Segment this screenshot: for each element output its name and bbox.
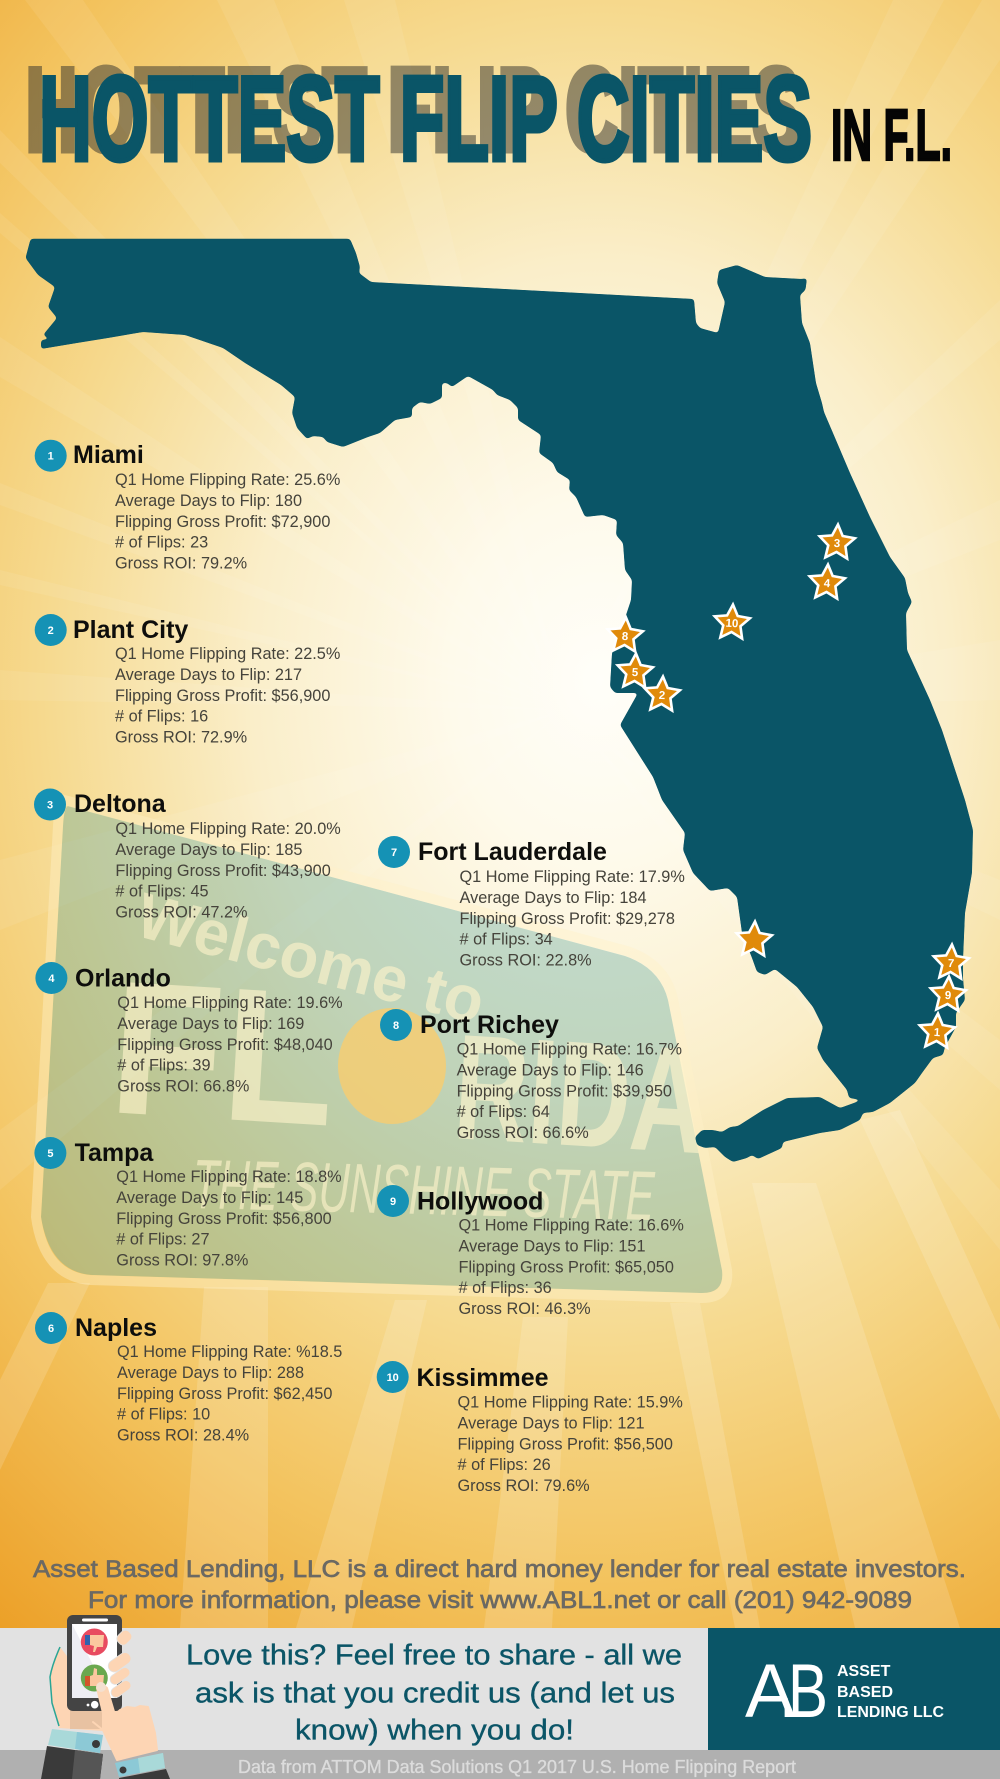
city 1: Miami (35, 440, 340, 573)
city 4: Orlando: Q1 Home Flipping Rate: 19.6% (117, 994, 343, 1012)
city 1: Miami: 1 (48, 451, 54, 463)
city 8: Port Richey: 8 (393, 1020, 399, 1032)
city 4: Orlando: Flipping Gross Profit: $48,040 (117, 1036, 333, 1054)
logo mark: B (788, 1649, 828, 1734)
source band (0, 1750, 1000, 1779)
city 8: Port Richey: # of Flips: 64 (457, 1103, 550, 1121)
star: 3 Deltona (819, 524, 856, 559)
city 9: Hollywood: 9 (390, 1196, 396, 1208)
city 3: Deltona: Average Days to Flip: 185 (115, 841, 302, 859)
city 7: Fort Lauderdale: 7 (391, 847, 397, 859)
star: 9 Hollywood (930, 976, 967, 1011)
star: 5 Tampa (617, 653, 654, 688)
city 10: Kissimmee: Average Days to Flip: 121 (458, 1414, 645, 1432)
city 3: Deltona: # of Flips: 45 (115, 883, 209, 901)
city 5: Tampa: Flipping Gross Profit: $56,800 (116, 1210, 332, 1228)
city 6: Naples: Gross ROI: 28.4% (117, 1427, 249, 1445)
city 10: Kissimmee: 10 (387, 1372, 399, 1384)
city 6: Naples: Average Days to Flip: 288 (117, 1364, 304, 1382)
city 1: Miami: Gross ROI: 79.2% (115, 555, 247, 573)
city 1: Miami: Q1 Home Flipping Rate: 25.6% (115, 471, 340, 489)
city 10: Kissimmee (377, 1361, 683, 1495)
city 6: Naples: Flipping Gross Profit: $62,450 (117, 1385, 332, 1403)
city 9: Hollywood: Flipping Gross Profit: $65,050 (458, 1258, 674, 1276)
share band (0, 1628, 708, 1750)
city 9: Hollywood (377, 1185, 684, 1318)
star: 8 Port Richey: 8 (621, 631, 629, 643)
logo wordmark (837, 1663, 944, 1721)
city 2: Plant City: Q1 Home Flipping Rate: 22.5% (115, 645, 340, 663)
star: 4 Orlando (809, 564, 846, 599)
city 5: Tampa: Gross ROI: 97.8% (116, 1252, 248, 1270)
star: 4 Orlando: 4 (823, 578, 831, 590)
city 1: Miami: Flipping Gross Profit: $72,900 (115, 513, 330, 531)
city 3: Deltona: Flipping Gross Profit: $43,900 (115, 862, 331, 880)
city 7: Fort Lauderdale: Average Days to Flip: 184 (460, 889, 647, 907)
city 5: Tampa: # of Flips: 27 (116, 1231, 210, 1249)
city 2: Plant City (35, 614, 340, 747)
city 8: Port Richey: Gross ROI: 66.6% (457, 1124, 589, 1142)
star: 3 Deltona: 3 (833, 538, 840, 550)
city 5: Tampa (34, 1137, 342, 1270)
city 10: Kissimmee: Q1 Home Flipping Rate: 15.9% (458, 1394, 683, 1412)
city 8: Port Richey: Port Richey (420, 1011, 559, 1039)
Florida map (26, 239, 973, 1162)
city 5: Tampa: Q1 Home Flipping Rate: 18.8% (116, 1168, 342, 1186)
city 9: Hollywood: # of Flips: 36 (458, 1279, 552, 1297)
icon: hand holding phone (41, 1615, 170, 1779)
city 7: Fort Lauderdale: # of Flips: 34 (460, 931, 553, 949)
source text: Data from ATTOM Data Solutions Q1 2017 U.S. Home Flipping Report (238, 1757, 796, 1777)
star: 8 Port Richey (607, 617, 644, 652)
city 4: Orlando: 4 (48, 973, 55, 985)
city 10: Kissimmee: Gross ROI: 79.6% (458, 1477, 590, 1495)
welcome sign (36, 800, 727, 1298)
logo mark (745, 1649, 828, 1734)
star: 7 Fort Lauderdale: 7 (947, 958, 954, 970)
share message: Love this? Feel free to share - all we (186, 1640, 682, 1672)
city 2: Plant City: Average Days to Flip: 217 (115, 666, 302, 684)
city 2: Plant City: 2 (48, 625, 54, 637)
sign text: FL: FL (104, 941, 342, 1167)
city 5: Tampa: Tampa (75, 1139, 154, 1167)
share message: ask is that you credit us (and let us (195, 1678, 675, 1710)
company blurb: For more information, please visit www.ABL1.net or call (201) 942-9089 (88, 1587, 912, 1614)
star: 10 Kissimmee (714, 604, 751, 639)
city 6: Naples: # of Flips: 10 (117, 1406, 210, 1424)
city 6: Naples: 6 (48, 1323, 54, 1335)
city 1: Miami: # of Flips: 23 (115, 534, 208, 552)
star: 5 Tampa: 5 (631, 667, 639, 679)
star: 1 Miami: 1 (933, 1027, 941, 1039)
city 6: Naples: Q1 Home Flipping Rate: %18.5 (117, 1343, 342, 1361)
sign text: welcome to: Welcome to (129, 879, 492, 1038)
city 6: Naples (35, 1312, 342, 1445)
city 4: Orlando: # of Flips: 39 (117, 1057, 211, 1075)
city 3: Deltona: Gross ROI: 47.2% (115, 904, 248, 922)
star: 6 Naples (736, 921, 773, 956)
city 9: Hollywood: Hollywood (417, 1188, 543, 1216)
city 4: Orlando: Gross ROI: 66.8% (117, 1078, 249, 1096)
logo mark: A (745, 1649, 795, 1734)
logo mark: L (782, 1692, 800, 1723)
city 3: Deltona (34, 788, 341, 922)
sign text: the sunshine state: THE SUNSHINE STATE (192, 1145, 656, 1235)
city 9: Hollywood: Average Days to Flip: 151 (458, 1237, 646, 1255)
city 9: Hollywood: Gross ROI: 46.3% (458, 1300, 591, 1318)
company blurb (33, 1556, 966, 1614)
city 1: Miami: Miami (73, 441, 144, 469)
logo wordmark: LENDING LLC (837, 1704, 944, 1721)
sign text: RIDA: RIDA (450, 1002, 710, 1185)
city 7: Fort Lauderdale: Fort Lauderdale (418, 838, 607, 866)
city 8: Port Richey: Average Days to Flip: 146 (457, 1061, 644, 1079)
city 2: Plant City: Flipping Gross Profit: $56,900 (115, 687, 330, 705)
city 9: Hollywood: Q1 Home Flipping Rate: 16.6% (458, 1216, 684, 1234)
city 10: Kissimmee: # of Flips: 26 (458, 1456, 551, 1474)
star: 10 Kissimmee: 10 (725, 618, 739, 630)
city 3: Deltona: 3 (47, 800, 53, 812)
city 8: Port Richey: Flipping Gross Profit: $39,950 (457, 1082, 672, 1100)
share message: know) when you do! (295, 1714, 574, 1746)
star: 2 Plant City: 2 (658, 690, 665, 702)
logo panel (708, 1628, 1000, 1750)
city 7: Fort Lauderdale: Flipping Gross Profit: $29,278 (460, 910, 675, 928)
city 2: Plant City: # of Flips: 16 (115, 708, 208, 726)
city 10: Kissimmee: Flipping Gross Profit: $56,500 (458, 1435, 673, 1453)
city 4: Orlando: Average Days to Flip: 169 (117, 1015, 304, 1033)
city 4: Orlando: Orlando (75, 964, 171, 992)
sign orange circle (338, 1008, 446, 1124)
share message (186, 1640, 682, 1746)
city 7: Fort Lauderdale (378, 836, 685, 970)
city 5: Tampa: 5 (47, 1148, 53, 1160)
city 10: Kissimmee: Kissimmee (416, 1364, 549, 1392)
logo wordmark: BASED (837, 1684, 893, 1701)
city 4: Orlando (35, 962, 343, 1096)
star: 7 Fort Lauderdale (933, 944, 970, 979)
city 3: Deltona: Deltona (74, 790, 167, 818)
city 8: Port Richey: Q1 Home Flipping Rate: 16.7% (457, 1040, 682, 1058)
city 7: Fort Lauderdale: Q1 Home Flipping Rate: 17.9% (460, 868, 685, 886)
company blurb: Asset Based Lending, LLC is a direct hard money lender for real estate investors. (33, 1556, 966, 1583)
star: 1 Miami (919, 1013, 956, 1048)
city 3: Deltona: Q1 Home Flipping Rate: 20.0% (115, 820, 341, 838)
star: 9 Hollywood: 9 (944, 990, 951, 1002)
city 7: Fort Lauderdale: Gross ROI: 22.8% (460, 952, 592, 970)
logo wordmark: ASSET (837, 1663, 891, 1680)
city 2: Plant City: Gross ROI: 72.9% (115, 729, 247, 747)
city 1: Miami: Average Days to Flip: 180 (115, 492, 302, 510)
city 6: Naples: Naples (75, 1314, 157, 1342)
city 8: Port Richey (380, 1009, 682, 1142)
city 5: Tampa: Average Days to Flip: 145 (116, 1189, 303, 1207)
city 2: Plant City: Plant City (73, 616, 188, 644)
star: 2 Plant City (644, 676, 681, 711)
